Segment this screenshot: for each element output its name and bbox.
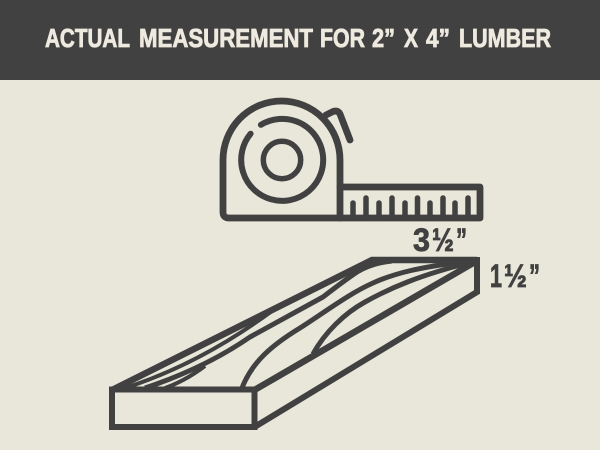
top face outline [112,260,477,390]
title: FOR [320,25,365,53]
wood grain [125,261,472,388]
blade ticks [353,198,468,216]
lumber board [112,257,477,427]
title: X [404,25,418,53]
header band [0,0,600,80]
height label: ” [529,258,540,294]
title [45,25,551,53]
title: LUMBER [459,25,551,53]
title: ACTUAL [45,25,130,53]
tape outer ring [241,119,323,201]
front face [112,390,254,427]
right side edge [254,257,477,427]
height label: 1 [490,258,502,294]
tape handle [326,111,350,140]
icon: tape measure [223,101,480,218]
title: 4” [426,25,450,53]
tape blade [340,187,480,218]
width label [413,222,467,258]
tape body [223,101,340,218]
height label: ½ [504,258,527,294]
title: MEASUREMENT [139,25,313,53]
width label: ” [456,222,467,258]
height label [490,258,540,294]
width label: ½ [432,222,454,258]
tape hub [263,141,301,179]
width label: 3 [413,222,430,258]
title: 2” [372,25,395,53]
